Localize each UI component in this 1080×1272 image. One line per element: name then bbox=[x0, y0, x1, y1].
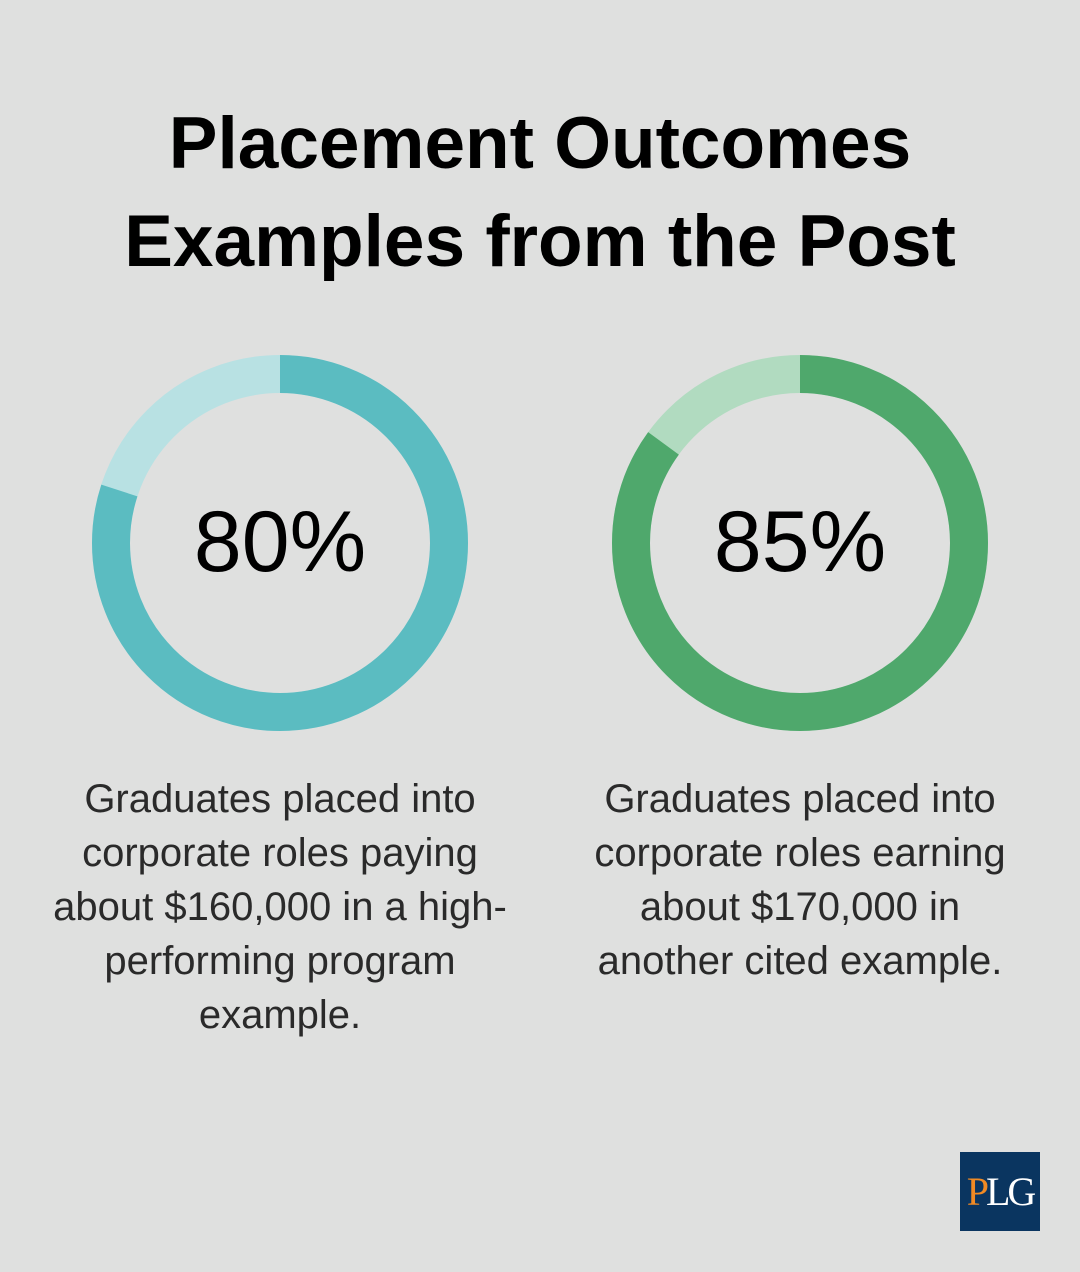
text: left description: Graduates placed into bbox=[84, 777, 476, 821]
text: right description: Graduates placed into bbox=[604, 777, 996, 821]
logo: PLG: PLG bbox=[967, 1169, 1033, 1214]
donut chart: 80% bbox=[92, 355, 468, 731]
logo: PLG bbox=[960, 1152, 1040, 1231]
text: left description: about $160,000 in a high- bbox=[53, 885, 507, 929]
text: right description: another cited example. bbox=[598, 939, 1002, 983]
text: left description: example. bbox=[199, 993, 361, 1037]
text: right description: about $170,000 in bbox=[640, 885, 960, 929]
donut chart: 85% bbox=[612, 355, 988, 731]
title: Placement Outcomes bbox=[169, 103, 911, 184]
text: right description bbox=[594, 777, 1006, 983]
donut chart: 85%: 85% bbox=[714, 494, 886, 590]
text: left description: performing program bbox=[104, 939, 456, 983]
text: left description bbox=[53, 777, 507, 1037]
text: left description: corporate roles paying bbox=[82, 831, 478, 875]
text: right description: corporate roles earning bbox=[594, 831, 1006, 875]
title bbox=[124, 103, 956, 282]
donut chart: 80%: 80% bbox=[194, 494, 366, 590]
title: Examples from the Post bbox=[124, 201, 956, 282]
